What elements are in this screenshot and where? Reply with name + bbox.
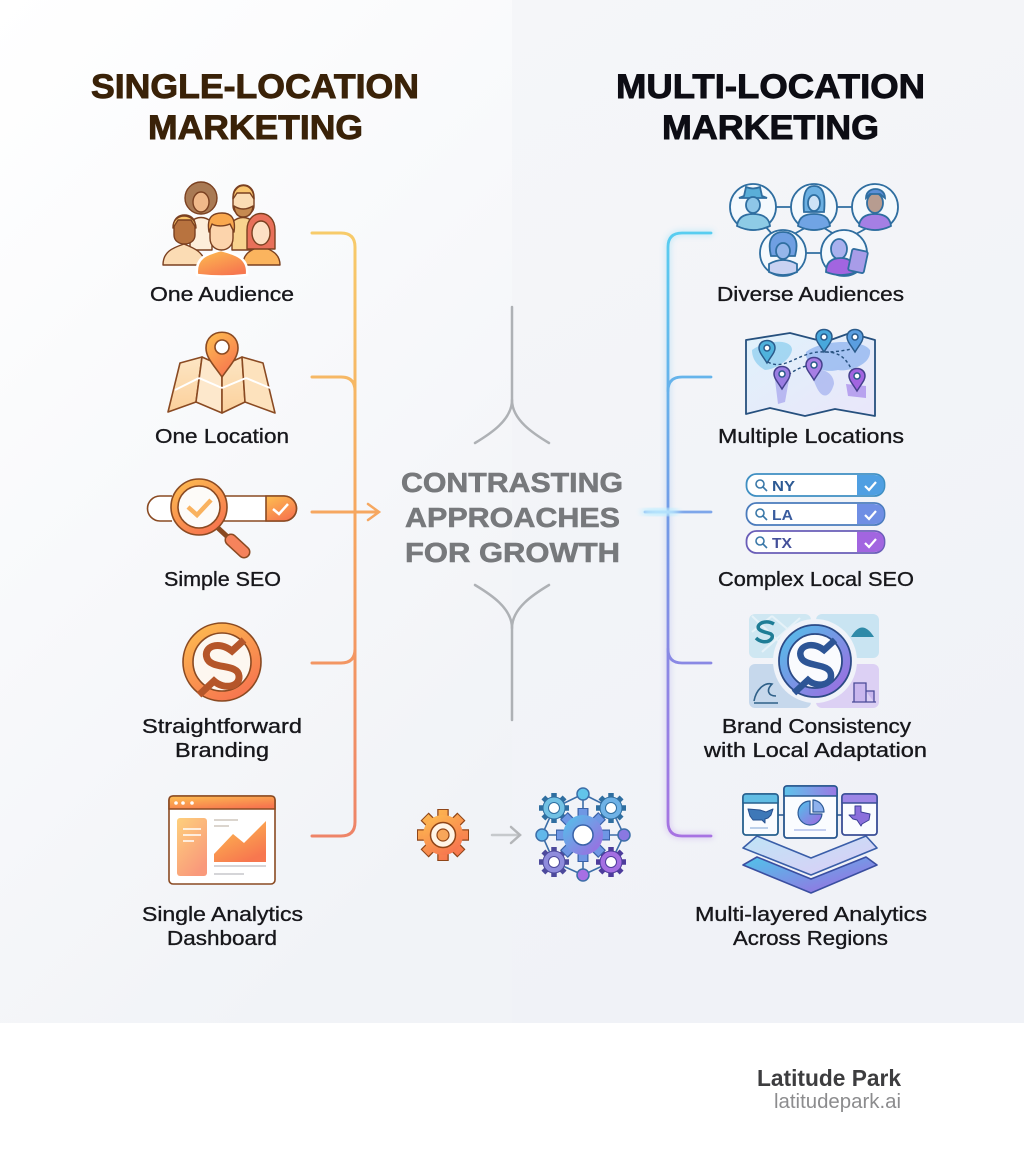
icon: location search bars: NY [772,478,795,495]
label: diverse audiences: Diverse Audiences [717,283,904,306]
icon: single orange gear [417,809,469,861]
panel: single-location items [142,182,303,950]
label: one location: One Location [155,425,289,448]
center heading: CONTRASTING [401,467,623,498]
label: single analytics dashboard: Single Analytics [142,903,303,926]
label: brand consistency with local adaptation: Brand Consistency [722,715,912,738]
panel: multi-location items [695,184,927,950]
background: left panel [0,0,512,1023]
center divider: top fork [475,307,549,443]
label: straightforward branding: Branding [175,739,269,762]
icon: analytics dashboard [169,796,275,884]
icon: search bar with magnifier [147,479,296,552]
icon: layered analytics [743,786,877,893]
map pins [759,330,865,391]
center heading: FOR GROWTH [405,537,620,568]
footer: brand name and url [757,1065,901,1113]
footer: brand name and url: latitudepark.ai [774,1090,901,1113]
title: single-location marketing [91,68,419,147]
icon: brand consistency tiles [749,614,879,708]
icon: gear network [536,788,630,881]
label: one audience: One Audience [150,283,294,306]
icon: location search bars: LA [772,507,793,524]
icon: diverse audience network [730,184,898,276]
network nodes [536,788,630,881]
small gear: bottom right [596,847,626,877]
label: straightforward branding [142,715,302,762]
label: single analytics dashboard [142,903,303,950]
connector: left bracket [312,233,379,836]
central gear [556,808,610,862]
center heading: APPROACHES [405,502,620,533]
footer: brand name and url: Latitude Park [757,1065,901,1091]
label: multiple locations: Multiple Locations [718,425,904,448]
icon: location search bars [746,474,884,553]
label: brand consistency with local adaptation [703,715,927,762]
title: multi-location marketing [616,68,925,147]
arrow: single to multi [492,827,520,843]
center divider: bottom fork [475,585,549,720]
title: multi-location marketing: MARKETING [662,109,879,147]
label: complex local seo: Complex Local SEO [718,568,914,591]
label: multi-layered analytics across regions [695,903,927,950]
connector: right bracket [640,233,711,836]
title: single-location marketing: MARKETING [148,109,363,147]
background: right panel [512,0,1024,1023]
label: single analytics dashboard: Dashboard [167,927,277,950]
icon: location search bars: TX [772,535,792,552]
title: single-location marketing: SINGLE-LOCATION [91,68,419,106]
label: simple seo: Simple SEO [164,568,281,591]
center heading [401,467,623,568]
label: multi-layered analytics across regions: Across Regions [733,927,888,950]
small gear: top left [539,793,569,823]
icon: one audience group [163,182,280,276]
small gear: bottom left [539,847,569,877]
title: multi-location marketing: MULTI-LOCATION [616,68,925,106]
icon: single map with pin [168,332,275,413]
label: straightforward branding: Straightforward [142,715,302,738]
icon: world map with pins [746,330,875,416]
label: brand consistency with local adaptation: with Local Adaptation [703,739,927,762]
label: multi-layered analytics across regions: Multi-layered Analytics [695,903,927,926]
small gear: top right [596,793,626,823]
icon: brand logo circle [183,623,261,701]
